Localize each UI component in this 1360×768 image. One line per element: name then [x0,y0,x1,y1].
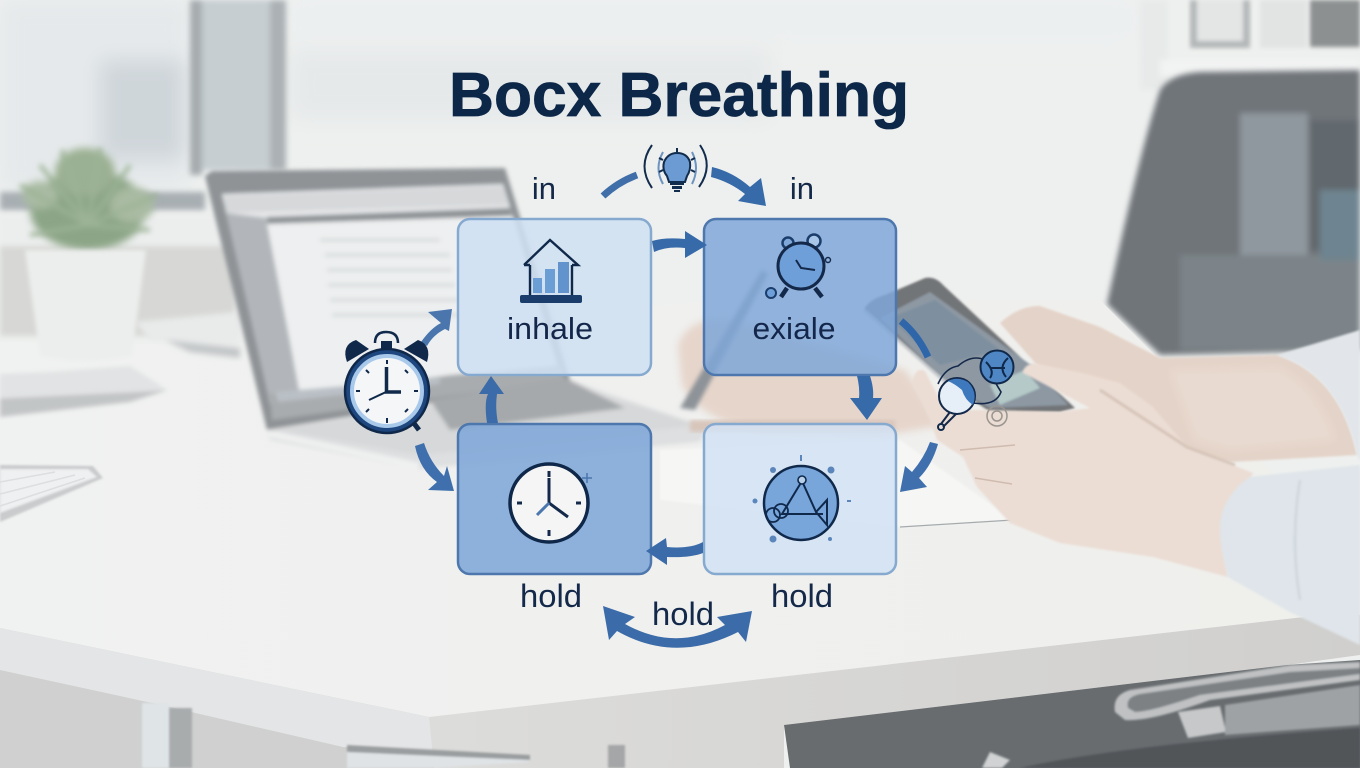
arrow: clock to inhale [421,309,452,346]
dark floor area [784,660,1360,768]
label: in left: in [532,171,556,206]
arrow: hold to inhale [479,376,504,423]
arrow: hold to hold bottom [646,538,703,565]
paper [660,440,1013,527]
label: in right: in [790,171,814,206]
title: Bocx Breathing [449,61,909,130]
table legs [142,703,625,768]
upper hand and forearm [1000,306,1357,462]
plant and pot [20,148,158,361]
arrow: top left arc [603,175,637,196]
chair back [1107,70,1360,355]
small objects on desk [135,312,240,345]
arrow: inhale to exhale [652,231,707,258]
laptop [205,168,708,469]
icon: alarm clock [766,234,830,298]
icon: circle diagram [752,455,851,542]
icon: clock [510,464,592,542]
label: hold right: hold [771,578,833,614]
arrow: right to hold [900,442,938,492]
icon: light bulb with waves [644,145,707,192]
phone [864,278,1075,412]
label: exhale: exiale [752,311,836,346]
arrow: exhale to hold [850,376,882,420]
arrow: over phone [901,321,928,357]
shelf boxes [1190,0,1360,48]
panel: hold right [704,424,896,574]
arrow: bottom double arc [603,606,752,648]
desk surface [0,300,1360,717]
arrow: clock to hold [415,443,454,491]
panel: inhale [458,219,651,375]
back hand and pen [678,270,945,436]
front hand [912,363,1253,577]
label: inhale: inhale [507,311,593,346]
keyboard [0,465,103,522]
label: hold left: hold [520,578,582,614]
icon: cloud and gear on phone [938,350,1014,430]
desk edge and under [0,628,434,768]
icon: house with bars [520,240,582,303]
icon: large alarm clock [345,332,429,433]
panel: hold left [458,424,651,574]
shirt sleeves [1220,330,1360,645]
arrow: top right arc [711,167,766,206]
panel: exhale [704,219,896,375]
label: hold centre: hold [652,596,714,632]
window and wall [0,0,1138,190]
